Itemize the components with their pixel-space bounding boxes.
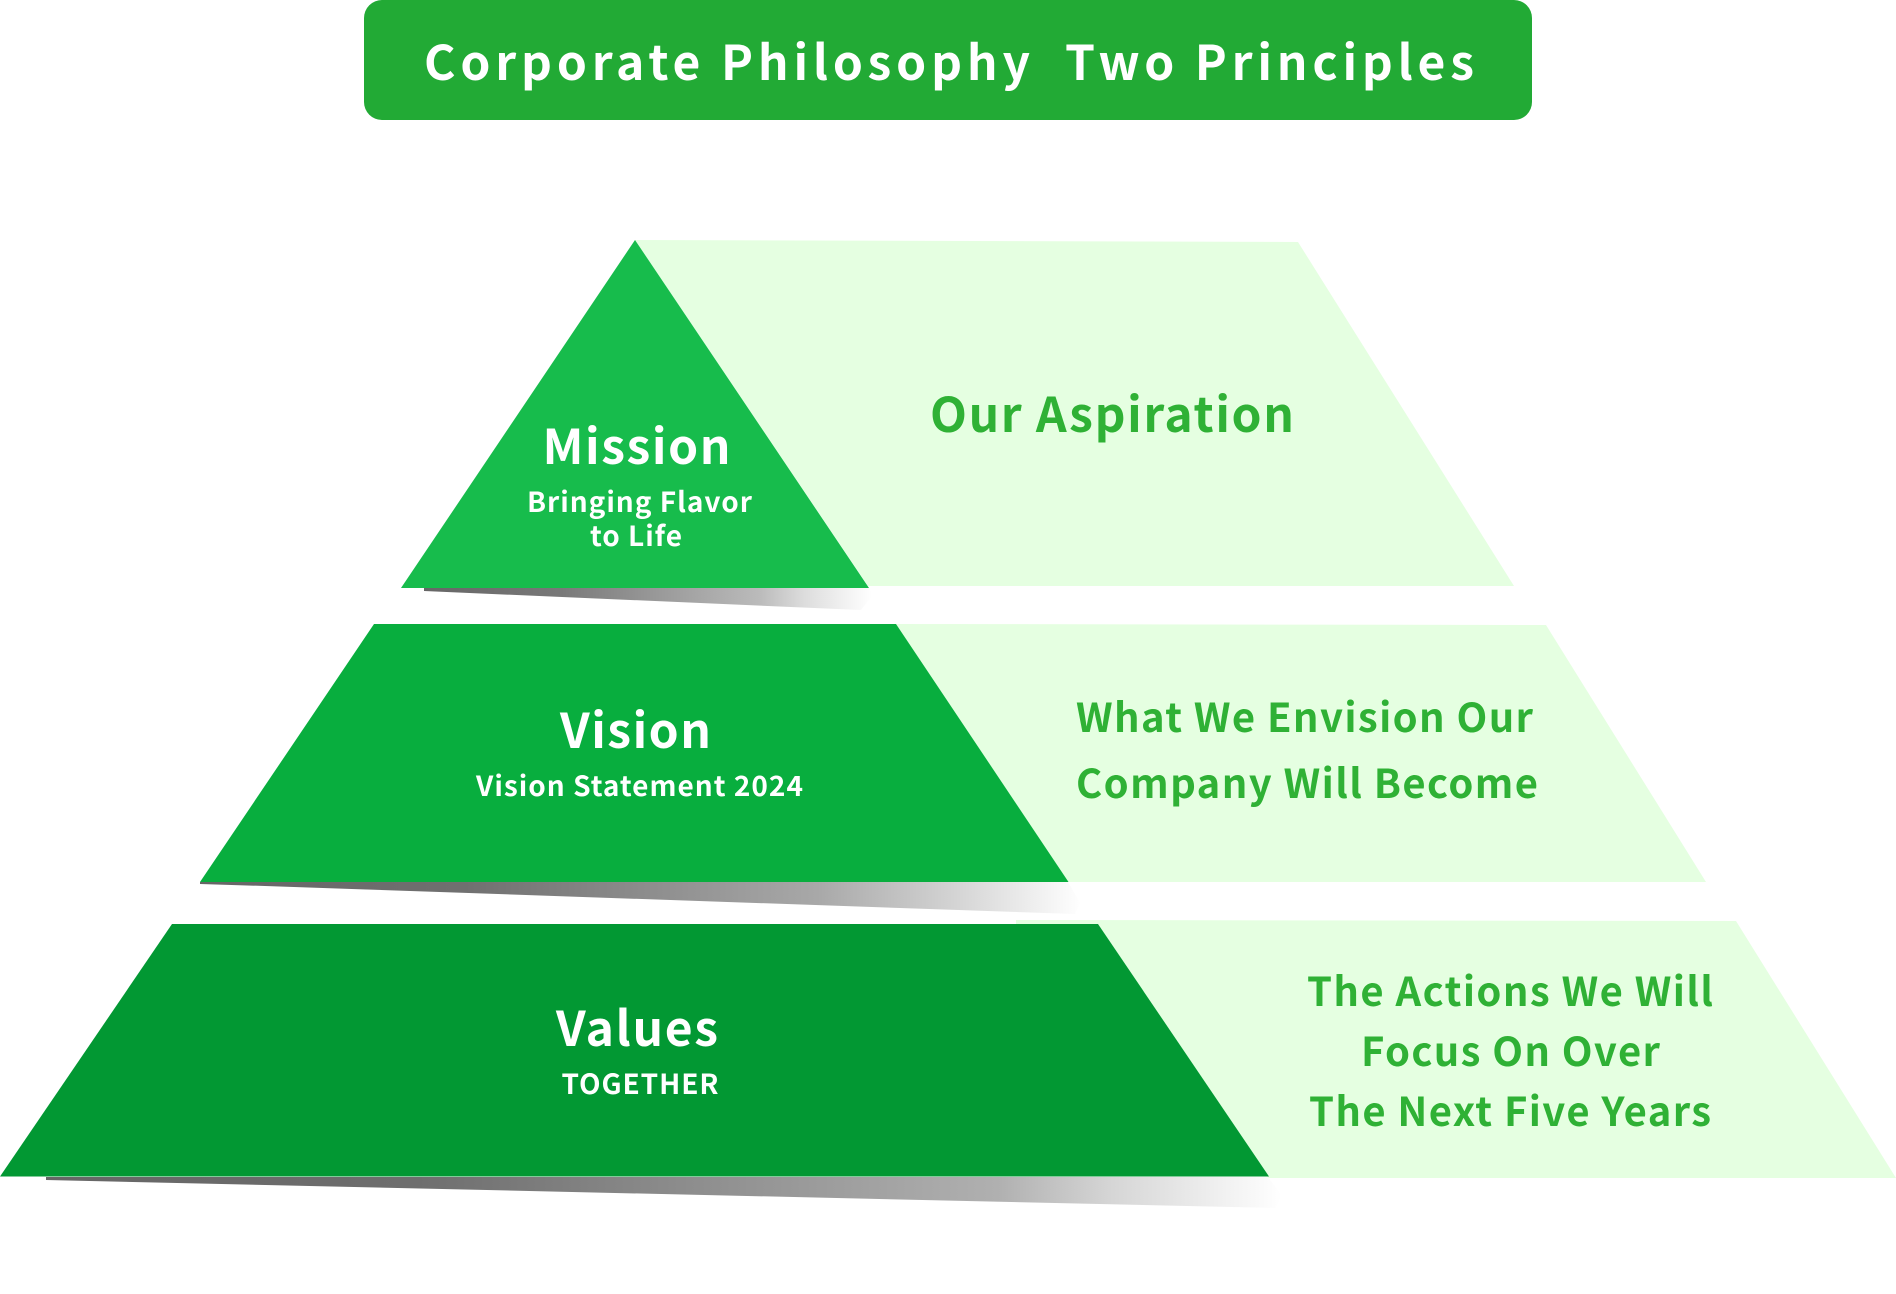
mission description panel [635,240,1514,586]
values description: Focus On Over [1361,1020,1661,1078]
mission subtitle: to Life [590,515,682,555]
vision description panel [896,624,1706,882]
banner heading: Corporate Philosophy [424,24,1030,94]
values description [1307,960,1713,1138]
values description panel [1016,920,1896,1178]
banner heading [424,24,1474,94]
vision label: Vision [559,692,711,762]
vision description: Company Will Become [1076,752,1538,810]
values description: The Actions We Will [1307,960,1713,1018]
vision description: What We Envision Our [1076,686,1534,744]
mission triangle [401,240,869,588]
values description: The Next Five Years [1309,1080,1711,1138]
tier: values [0,920,1896,1208]
mission label: Mission [542,408,730,478]
vision description [1076,686,1538,810]
mission description: Our Aspiration [930,376,1294,446]
vision shadow [200,882,1080,914]
values shadow [46,1177,1282,1208]
mission subtitle: Bringing Flavor [527,481,753,521]
mission shadow [424,588,872,610]
title banner [364,0,1532,120]
banner background [364,0,1532,120]
tier: vision [200,624,1706,914]
values label: Values [555,990,718,1060]
vision trapezoid [200,624,1068,882]
vision subtitle: Vision Statement 2024 [475,765,803,805]
values subtitle: TOGETHER [562,1063,718,1103]
mission subtitle [527,481,753,555]
tier: mission [401,240,1514,610]
banner heading: Two Principles [1065,24,1474,94]
values trapezoid [0,924,1269,1176]
